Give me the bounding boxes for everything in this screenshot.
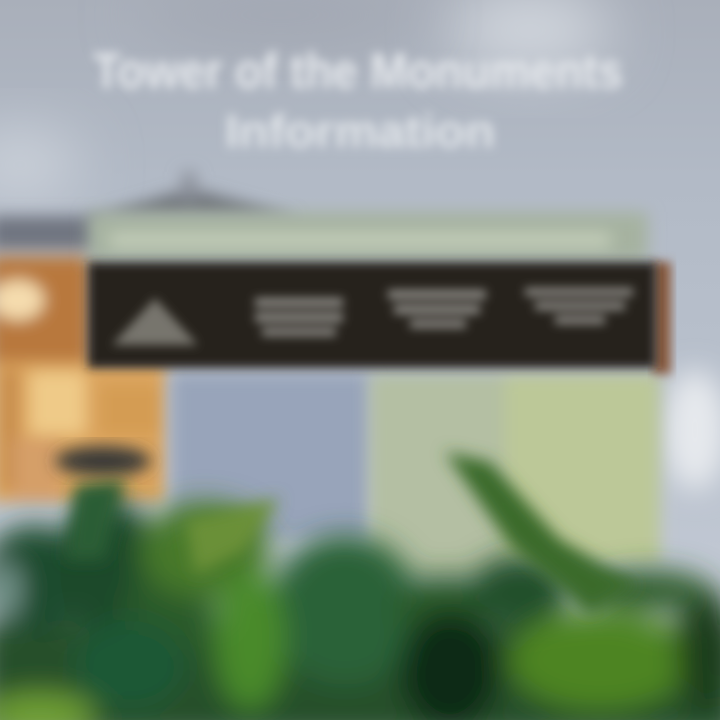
building: orange side wing bbox=[0, 256, 166, 502]
band item 2 bbox=[255, 298, 343, 336]
dark sign: planter bbox=[55, 446, 151, 476]
panel: blue wall bbox=[172, 374, 370, 539]
band item 3 bbox=[388, 290, 486, 328]
panel: pale green header band bbox=[88, 212, 648, 262]
foliage bbox=[0, 452, 720, 720]
leaf bbox=[65, 480, 125, 560]
subtitle: Information bbox=[225, 105, 495, 157]
band item 4 bbox=[525, 288, 633, 324]
building: grey roof bbox=[0, 172, 300, 250]
leaf bbox=[185, 498, 280, 575]
leaf bbox=[445, 452, 640, 615]
title: Tower of the Monuments bbox=[93, 43, 623, 99]
panel: dark band bbox=[88, 262, 671, 374]
panel: green wall bbox=[370, 374, 660, 579]
band item 1 bbox=[112, 298, 198, 345]
